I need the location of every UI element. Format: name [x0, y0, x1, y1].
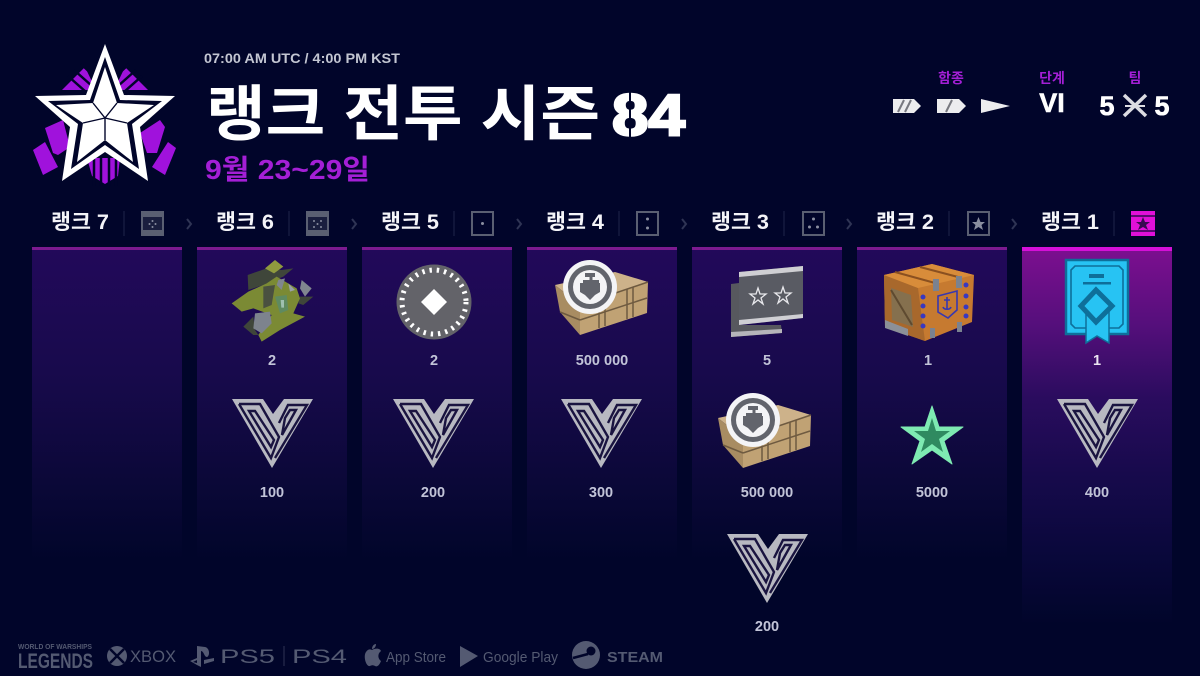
logo: Xbox — [107, 646, 176, 666]
panel: rank 3: 5 — [763, 353, 771, 369]
panel: rank 5 — [362, 247, 512, 560]
battle info: ship types: 함종 — [938, 70, 964, 86]
rank 1 header: 랭크 1 — [1041, 211, 1099, 234]
icon: tier V emblem — [393, 399, 474, 468]
title: 랭크 전투 시즌 — [206, 81, 600, 148]
battle info: tier — [1039, 70, 1065, 118]
logo: World of Warships Legends: LEGENDS — [18, 650, 93, 673]
rank 1 header — [1041, 211, 1155, 236]
panel: rank 1: 400 — [1085, 485, 1109, 501]
logo: App Store — [365, 644, 446, 666]
panel: rank 3 — [692, 247, 842, 635]
panel: rank 4 — [527, 247, 677, 560]
rank 4 header — [546, 211, 686, 236]
panel: rank 3: 500 000 — [741, 485, 793, 501]
rank 4 header: 랭크 4 — [546, 211, 604, 234]
broadcast time: 07:00 AM UTC / 4:00 PM KST — [204, 50, 400, 66]
panel: rank 5: 200 — [421, 485, 445, 501]
battle info: team size — [1099, 70, 1170, 121]
logo: PS5 and PS4: PS5 — [220, 647, 275, 668]
rank 7 header: 랭크 7 — [51, 211, 109, 234]
rank 7 header — [51, 211, 191, 236]
logo: Google Play — [460, 646, 558, 667]
title: 84 — [612, 83, 685, 148]
icon: tier V emblem — [232, 399, 313, 468]
rank 5 header: 랭크 5 — [381, 211, 439, 234]
panel: rank 4: 300 — [589, 485, 613, 501]
icon: rank flags — [731, 266, 803, 337]
panel: rank 2: 1 — [924, 353, 932, 369]
panel: rank 4: 500 000 — [576, 353, 628, 369]
logo: PS5 and PS4: PS4 — [292, 647, 348, 668]
panel: rank 6 — [197, 247, 347, 560]
battle info: ship types — [893, 70, 1010, 113]
logo: App Store: App Store — [386, 649, 446, 666]
icon: tier V emblem — [727, 534, 808, 603]
panel: rank 6: 100 — [260, 485, 284, 501]
battle info: tier: 단계 — [1039, 70, 1065, 86]
panel: rank 2: 5000 — [916, 485, 948, 501]
icon: signal token — [396, 264, 472, 340]
icon: tier V emblem — [1057, 399, 1138, 468]
logo: Google Play: Google Play — [483, 649, 558, 666]
icon: certificate — [1066, 260, 1128, 343]
panel: rank 2 — [857, 247, 1007, 560]
rank 3 header — [711, 211, 851, 236]
logo: Steam — [572, 641, 663, 669]
rank 3 header: 랭크 3 — [711, 211, 769, 234]
icon: tier V emblem — [561, 399, 642, 468]
battle info: team size: 팀 — [1129, 70, 1141, 86]
battle info: tier: VI — [1039, 88, 1065, 118]
logo: Steam: STEAM — [607, 649, 663, 666]
panel: rank 1 — [1022, 247, 1172, 625]
rank 5 header — [381, 211, 521, 236]
logo: World of Warships Legends: WORLD OF WARSHIPS — [18, 644, 92, 651]
icon: camouflage — [232, 260, 313, 342]
rank 6 header — [216, 211, 356, 236]
dates: 9월 23~29일 — [205, 154, 370, 185]
footer: platform logos — [18, 641, 663, 673]
battle info: team size: 5 — [1154, 91, 1170, 121]
icon: supply crate — [884, 264, 974, 341]
rank 2 header: 랭크 2 — [876, 211, 934, 234]
logo: Xbox: XBOX — [130, 647, 176, 666]
icon: credit crate — [718, 393, 811, 468]
rank 2 header — [876, 211, 1016, 236]
logo: rank star emblem — [33, 44, 176, 186]
icon: green star currency — [901, 406, 963, 464]
logo: World of Warships Legends — [18, 644, 93, 673]
logo: PS5 and PS4 — [190, 646, 348, 668]
rank 6 header: 랭크 6 — [216, 211, 274, 234]
panel: rank 6: 2 — [268, 353, 276, 369]
panel: rank 5: 2 — [430, 353, 438, 369]
panel: rank 3: 200 — [755, 619, 779, 635]
panel: rank 1: 1 — [1093, 353, 1101, 369]
panel: rank 7 — [32, 247, 182, 560]
icon: credit crate — [555, 260, 648, 335]
battle info: team size: 5 — [1099, 91, 1115, 121]
